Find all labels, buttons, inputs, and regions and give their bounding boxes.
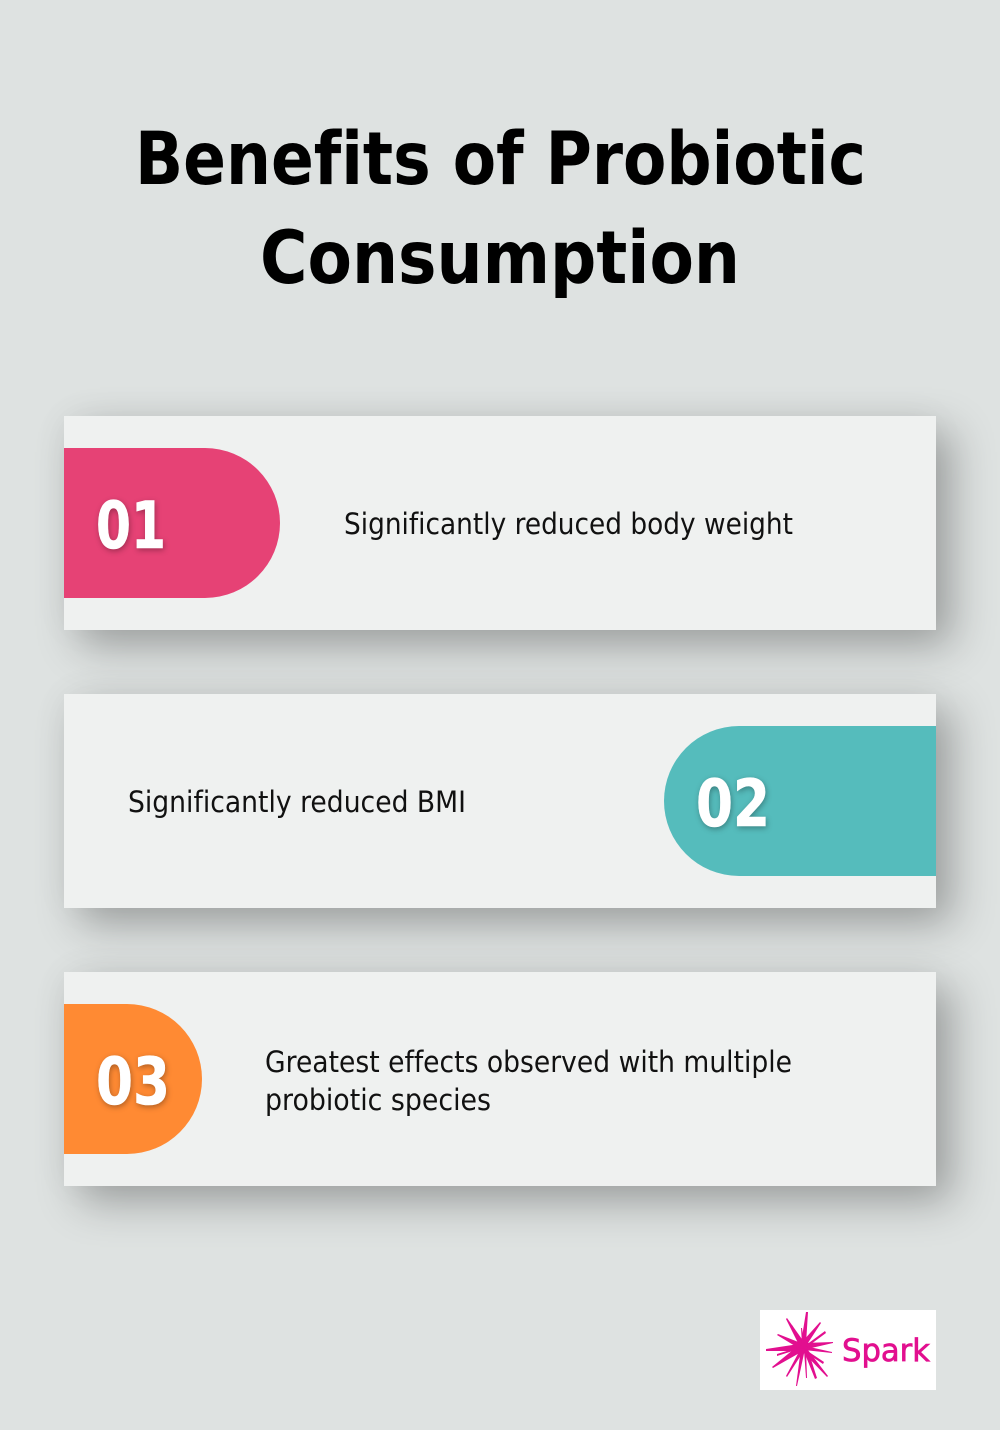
number 03: 03 (96, 1045, 170, 1120)
number 02: 02 (696, 767, 770, 842)
logo: Spark (760, 1310, 936, 1390)
text: benefit 01: Significantly reduced body weight (344, 507, 793, 541)
number 01: 01 (96, 489, 166, 564)
icon: spark burst (766, 1312, 833, 1386)
badge: 03 (64, 1004, 202, 1154)
panel: benefit 01 (64, 416, 936, 630)
badge: 02 (664, 726, 936, 876)
text: benefit 02: Significantly reduced BMI (128, 785, 466, 819)
panel: benefit 03 (64, 972, 936, 1186)
title (135, 117, 866, 301)
text: benefit 03: probiotic species (265, 1083, 491, 1117)
title: Benefits of Probiotic (135, 117, 866, 202)
panel: benefit 02 (64, 694, 936, 908)
text: benefit 03: Greatest effects observed with multiple (265, 1045, 792, 1079)
title: Consumption (260, 216, 740, 301)
wordmark: Spark (842, 1333, 930, 1369)
badge: 01 (64, 448, 280, 598)
text: benefit 03 (265, 1045, 792, 1117)
